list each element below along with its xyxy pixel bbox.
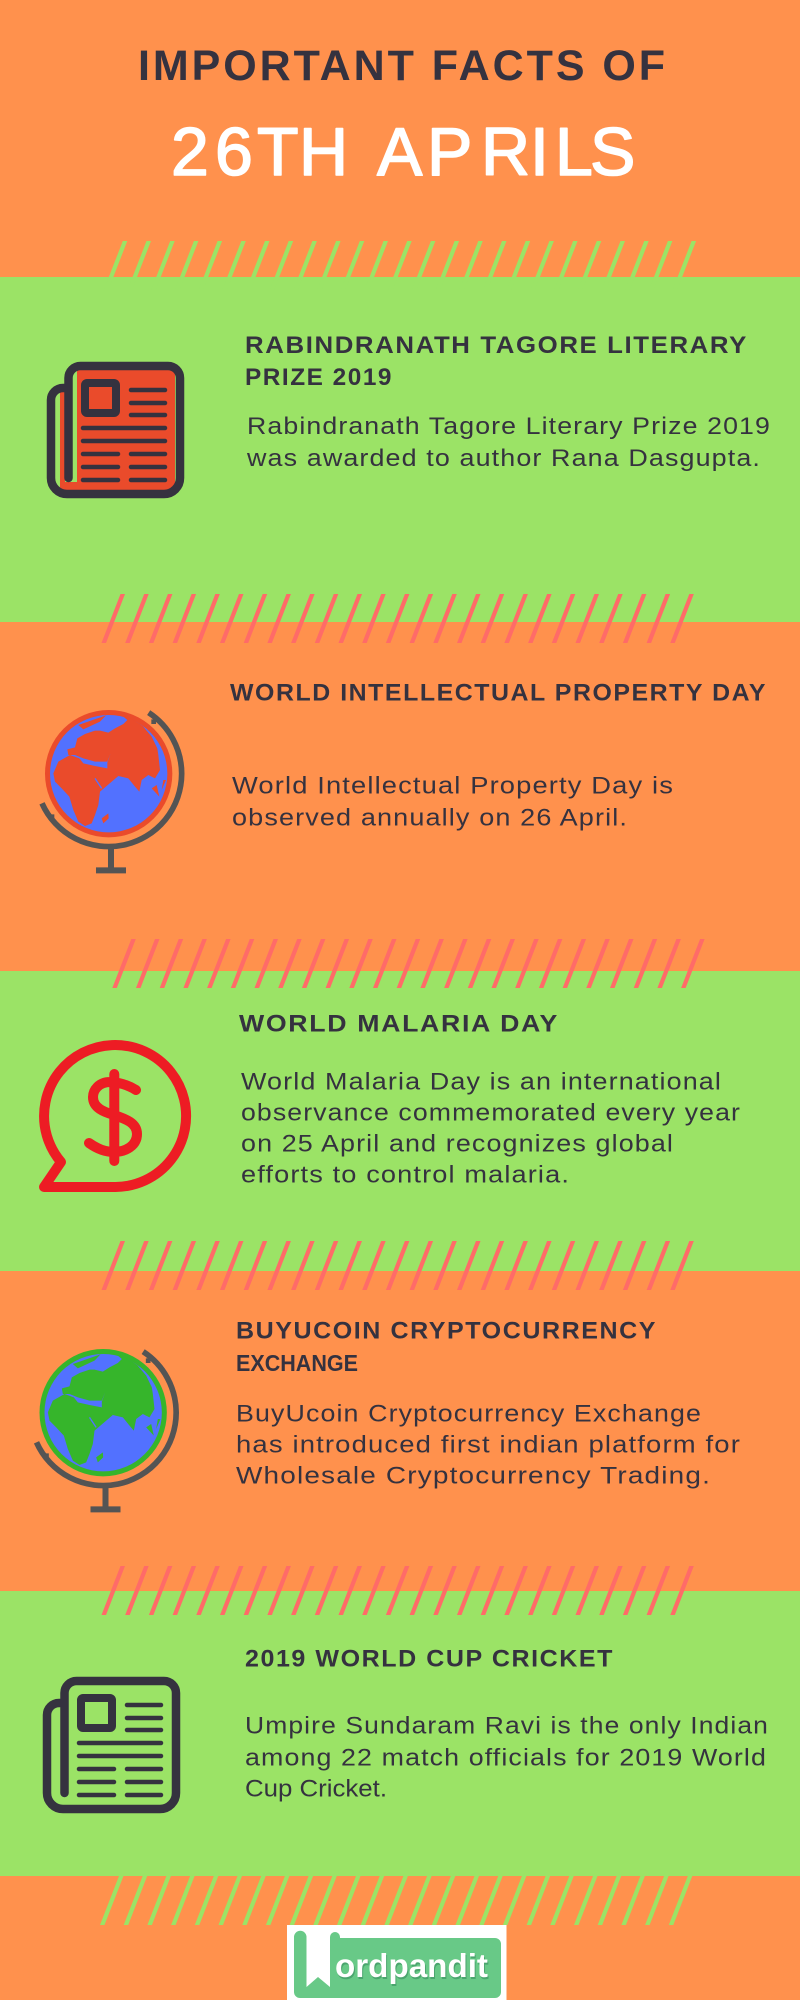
logo: Wordpandit: ordpandit bbox=[336, 1949, 489, 1986]
icon: green globe bbox=[36, 1349, 176, 1512]
logo: Wordpandit bbox=[287, 1925, 506, 2000]
heading bbox=[245, 332, 748, 391]
body text: World Malaria Day is an international bbox=[241, 1068, 722, 1096]
body text: on 25 April and recognizes global bbox=[241, 1130, 674, 1158]
body text: observed annually on 26 April. bbox=[232, 804, 628, 832]
body text: Wholesale Cryptocurrency Trading. bbox=[236, 1462, 711, 1490]
heading: WORLD INTELLECTUAL PROPERTY DAY bbox=[230, 680, 767, 706]
stripe divider: red 4 bbox=[102, 1566, 694, 1615]
icon: dollar speech bubble bbox=[44, 1045, 186, 1187]
heading bbox=[236, 1318, 657, 1376]
body text bbox=[246, 413, 771, 472]
body text: efforts to control malaria. bbox=[241, 1162, 570, 1188]
stripe divider: bottom green bbox=[100, 1876, 692, 1925]
body text: Rabindranath Tagore Literary Prize 2019 bbox=[247, 413, 771, 440]
panel: World Malaria Day bbox=[0, 971, 800, 1271]
logo: Wordpandit: ordpandit bbox=[335, 1947, 488, 1984]
body text: BuyUcoin Cryptocurrency Exchange bbox=[236, 1400, 702, 1428]
icon: red newspaper bbox=[51, 366, 180, 494]
panel: Rabindranath Tagore Literary Prize bbox=[0, 277, 800, 622]
stripe divider: red 1 bbox=[102, 594, 694, 643]
body text: was awarded to author Rana Dasgupta. bbox=[246, 445, 761, 472]
heading: 2019 WORLD CUP CRICKET bbox=[245, 1646, 614, 1672]
body text bbox=[236, 1400, 741, 1490]
body text: observance commemorated every year bbox=[241, 1100, 741, 1126]
panel: header bbox=[0, 0, 800, 277]
heading: RABINDRANATH TAGORE LITERARY bbox=[245, 332, 748, 359]
body text bbox=[232, 772, 674, 832]
body text bbox=[241, 1068, 741, 1188]
body text bbox=[245, 1712, 769, 1802]
heading: WORLD MALARIA DAY bbox=[239, 1010, 559, 1038]
panel: World Intellectual Property Day bbox=[0, 622, 800, 971]
body text: Umpire Sundaram Ravi is the only Indian bbox=[245, 1712, 769, 1740]
panel: BuyUcoin Cryptocurrency Exchange bbox=[0, 1271, 800, 1591]
stripe divider: top green bbox=[104, 241, 696, 290]
icon: dark newspaper bbox=[47, 1681, 176, 1809]
stripe divider: red 3 bbox=[102, 1241, 694, 1290]
heading: PRIZE 2019 bbox=[245, 364, 393, 391]
body text: among 22 match officials for 2019 World bbox=[245, 1744, 767, 1772]
body text: Cup Cricket. bbox=[245, 1776, 387, 1802]
heading: EXCHANGE bbox=[236, 1350, 358, 1376]
body text: World Intellectual Property Day is bbox=[232, 772, 674, 800]
panel: 2019 World Cup Cricket bbox=[0, 1591, 800, 1876]
icon: red globe bbox=[42, 710, 182, 873]
title line: IMPORTANT FACTS OF bbox=[138, 42, 665, 90]
body text: has introduced first indian platform for bbox=[236, 1432, 741, 1458]
date title: 26TH APRILS bbox=[171, 114, 635, 190]
stripe divider: red 2 bbox=[112, 939, 705, 988]
heading: BUYUCOIN CRYPTOCURRENCY bbox=[236, 1318, 657, 1344]
